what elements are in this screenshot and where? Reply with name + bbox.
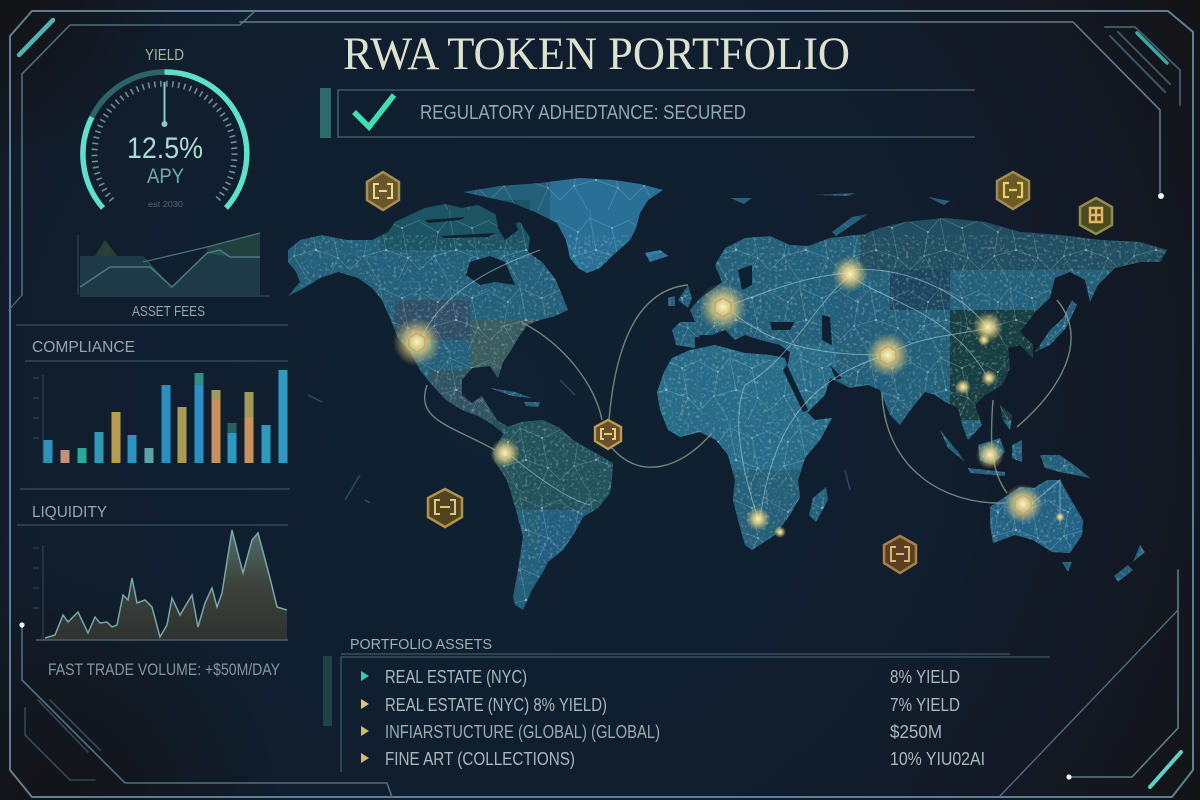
heading: liquidity: LIQUIDITY — [32, 504, 107, 521]
banner: regulatory status — [320, 88, 975, 138]
row: fine art: 10% YIU02AI — [890, 749, 985, 769]
icon: check mark — [354, 95, 394, 127]
panel: yield gauge — [83, 47, 247, 209]
row: infrastructure: INFIARSTUCTURE (GLOBAL) (GLOBAL) — [385, 722, 660, 742]
network lines — [420, 250, 1060, 525]
panel: portfolio assets — [323, 654, 1050, 772]
gauge dial — [83, 72, 247, 208]
icon: token badge — [1080, 198, 1112, 234]
gauge unit: APY — [147, 165, 184, 188]
route arcs — [425, 285, 1071, 503]
row: fine art: FINE ART (COLLECTIONS) — [385, 749, 575, 769]
heading: portfolio assets: PORTFOLIO ASSETS — [350, 636, 492, 653]
inland seas — [425, 205, 842, 412]
gauge value: 12.5% — [127, 132, 203, 165]
icon: token badge — [595, 420, 621, 449]
icon: token badge — [367, 172, 399, 210]
asset fees label: ASSET FEES — [132, 303, 205, 320]
row: real estate — [361, 667, 960, 687]
row: real estate 2: REAL ESTATE (NYC) 8% YIELD) — [385, 695, 607, 715]
row: infrastructure: $250M — [890, 722, 942, 742]
icon: token badge — [884, 536, 916, 573]
banner text: REGULATORY ADHEDTANCE: SECURED — [420, 102, 746, 124]
icon: token badge — [428, 489, 462, 527]
heading: compliance: COMPLIANCE — [32, 339, 135, 356]
row: infrastructure — [361, 722, 942, 742]
icon: token badge — [997, 172, 1029, 209]
world map — [280, 170, 1200, 620]
glow nodes — [393, 256, 1065, 538]
pacific islets — [308, 380, 850, 503]
row: real estate: 8% YIELD — [890, 667, 960, 687]
liquidity caption: FAST TRADE VOLUME: +$50M/DAY — [48, 660, 280, 679]
row: real estate: REAL ESTATE (NYC) — [385, 667, 527, 687]
title: RWA TOKEN PORTFOLIO — [343, 28, 850, 80]
bar chart: compliance — [33, 370, 288, 463]
gauge heading: YIELD — [145, 47, 184, 64]
area chart: liquidity — [33, 530, 288, 640]
chart: asset fees — [78, 233, 270, 296]
row: real estate 2 — [361, 695, 960, 715]
row: real estate 2: 7% YIELD — [890, 695, 960, 715]
row: fine art — [361, 749, 985, 769]
gauge footnote: est 2030 — [148, 200, 184, 209]
